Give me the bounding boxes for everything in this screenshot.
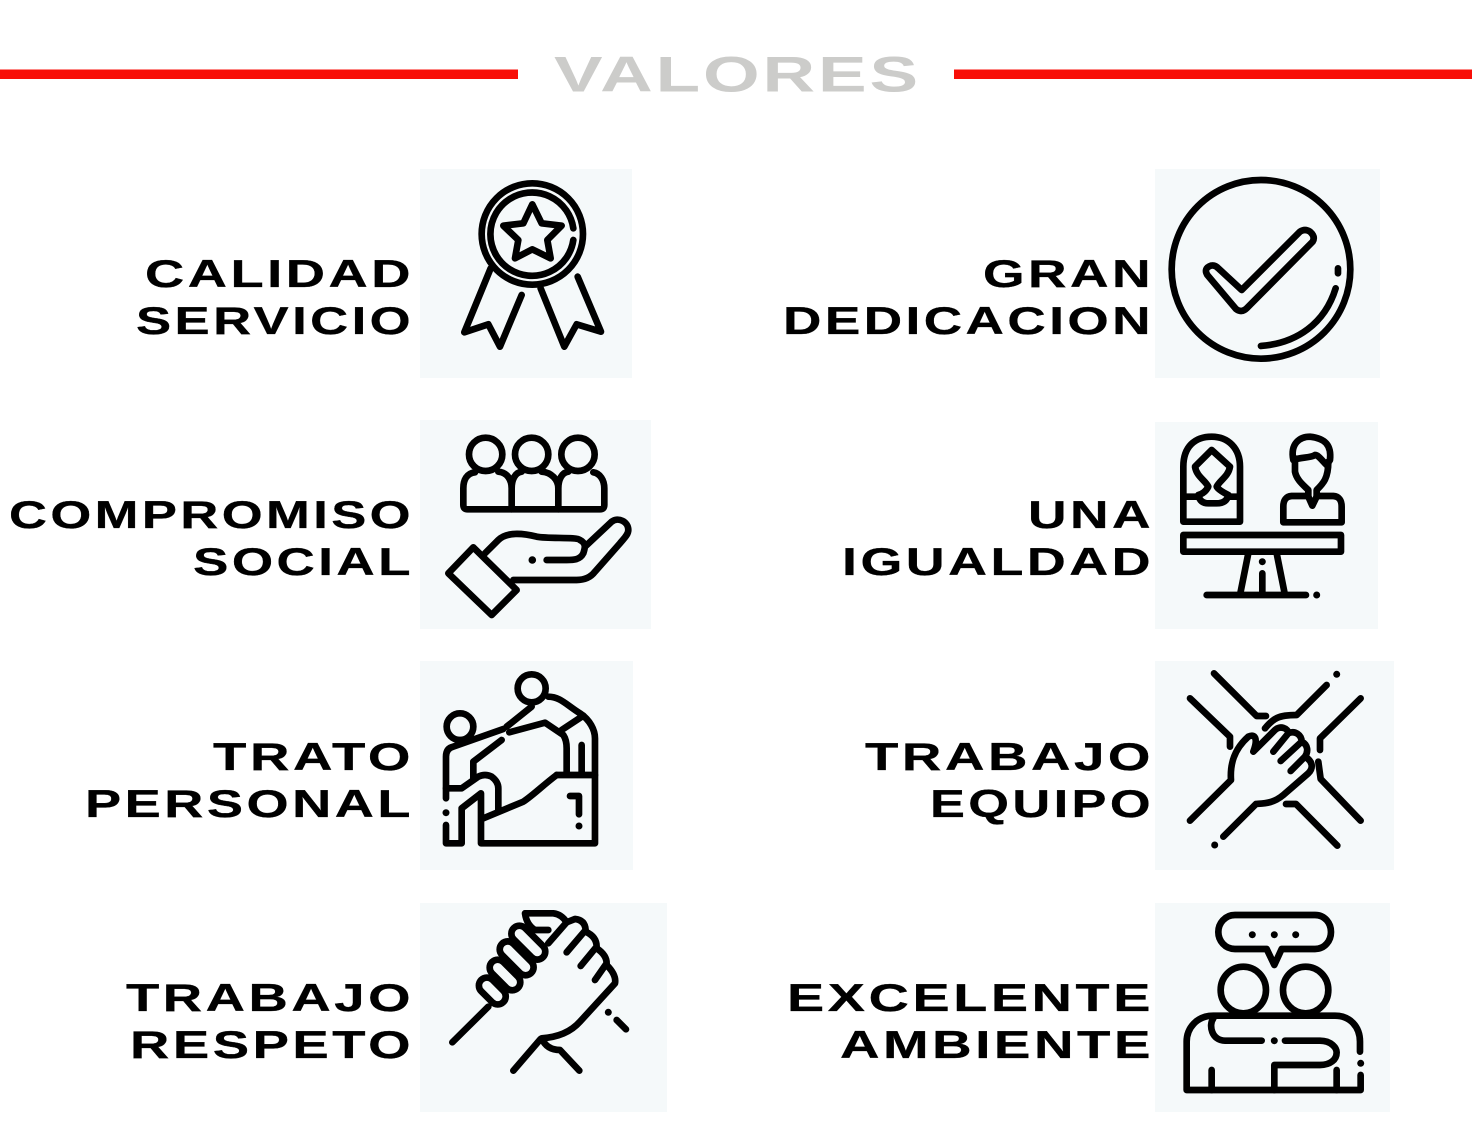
icon: clasped hands (420, 903, 667, 1112)
label: TRABAJO (865, 736, 1154, 779)
left red rule (0, 70, 518, 79)
label: AMBIENTE (840, 1024, 1154, 1067)
icon: hand holding people (420, 420, 651, 629)
icon: check mark in circle (1155, 169, 1380, 378)
label: IGUALDAD (842, 541, 1154, 584)
icon: person helping another climb (420, 661, 633, 870)
label (787, 977, 1154, 1067)
label: EQUIPO (930, 783, 1154, 826)
icon: woman and man on balance (1155, 422, 1378, 629)
label (136, 253, 414, 343)
label: GRAN (983, 253, 1154, 296)
right red rule (954, 70, 1472, 79)
label: COMPROMISO (9, 494, 414, 537)
panel: compromiso social (9, 420, 651, 629)
panel: trabajo equipo (865, 661, 1394, 870)
panel: excelente ambiente (787, 903, 1390, 1112)
panel: trabajo respeto (126, 903, 667, 1112)
label: RESPETO (130, 1024, 414, 1067)
label: SERVICIO (136, 300, 414, 343)
icon: two people embracing with speech bubble (1155, 903, 1390, 1112)
panel: calidad servicio (136, 169, 632, 378)
label: TRABAJO (126, 977, 414, 1020)
label: UNA (1028, 494, 1154, 537)
header: title with red rules (0, 46, 1472, 102)
label: TRATO (213, 736, 414, 779)
label (9, 494, 414, 584)
panel: gran dedicacion (783, 169, 1380, 378)
icon: medal with ribbon (420, 169, 632, 378)
label (85, 736, 414, 826)
label (865, 736, 1154, 826)
label: EXCELENTE (787, 977, 1154, 1020)
label (842, 494, 1154, 584)
label: DEDICACION (783, 300, 1154, 343)
label: SOCIAL (193, 541, 414, 584)
panel: una igualdad (842, 422, 1378, 629)
title: VALORES (554, 46, 921, 102)
icon: stacked hands (1155, 661, 1394, 870)
panel: trato personal (85, 661, 633, 870)
label (126, 977, 414, 1067)
label: PERSONAL (85, 783, 414, 826)
label: CALIDAD (145, 253, 414, 296)
label (783, 253, 1154, 343)
